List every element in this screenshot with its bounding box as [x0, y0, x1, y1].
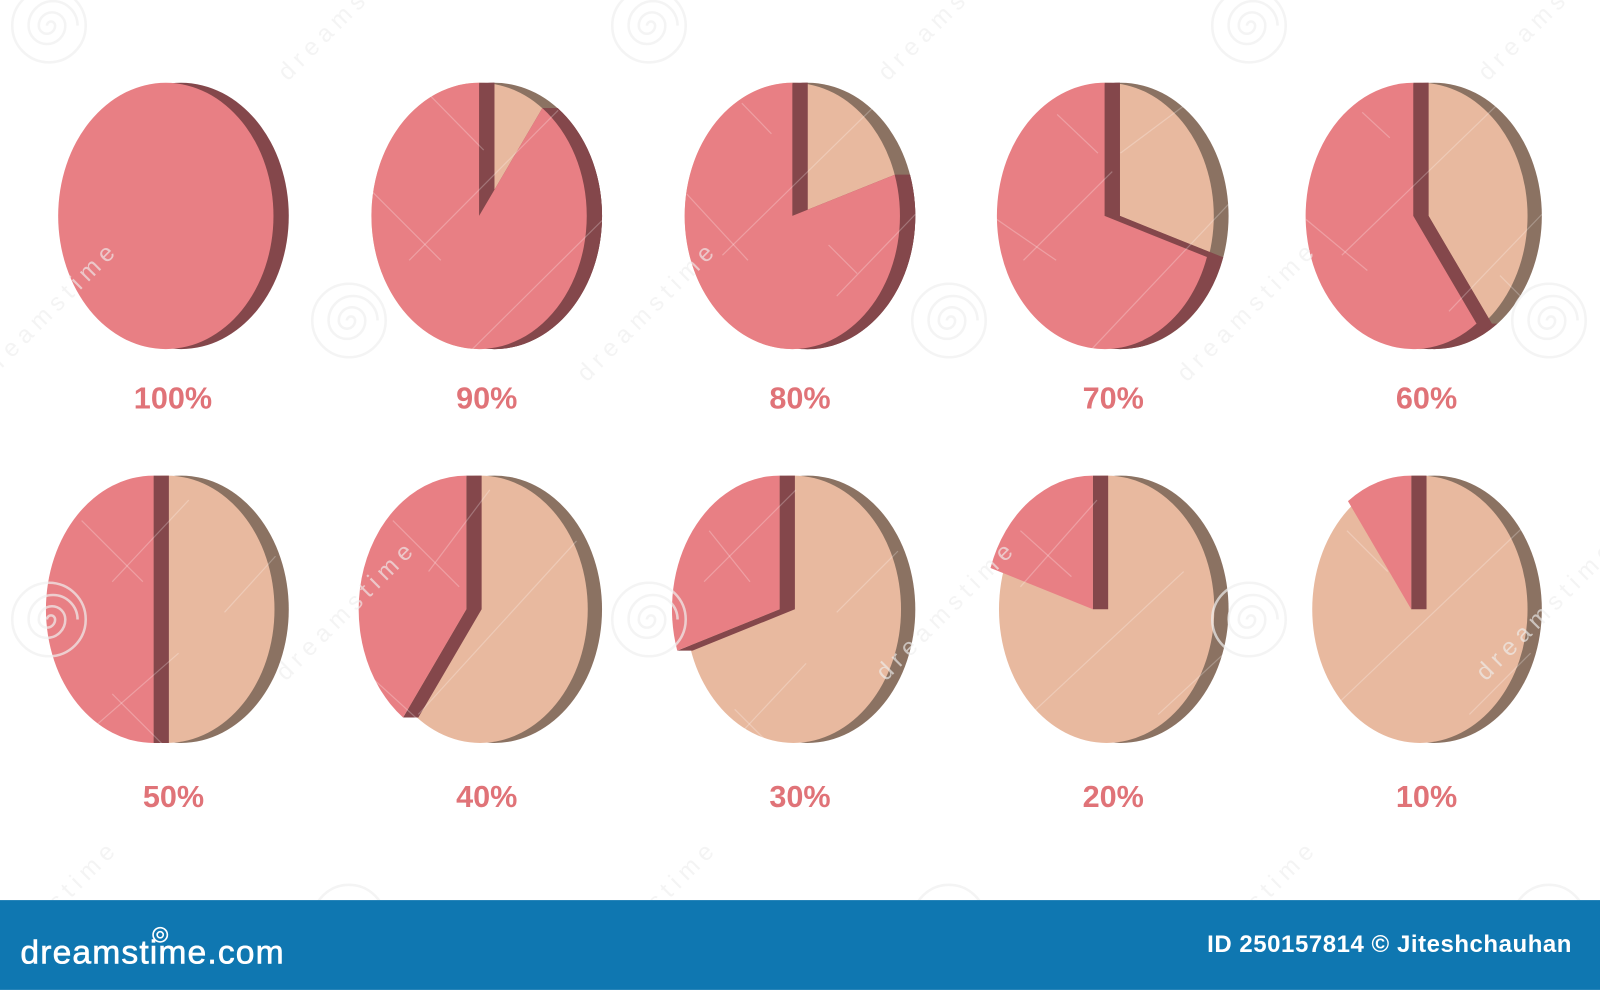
pie: 90%	[371, 83, 602, 349]
watermark: diagonal lines	[82, 95, 1542, 776]
label: 100%: 100%	[134, 381, 212, 415]
label: 40%: 40%	[456, 780, 517, 814]
label: 10%: 10%	[1396, 780, 1457, 814]
label: 70%: 70%	[1083, 381, 1144, 415]
footer logo spiral	[153, 928, 167, 942]
label: 80%: 80%	[769, 381, 831, 415]
label: 90%: 90%	[456, 381, 517, 415]
pie: 40%	[359, 476, 602, 743]
pie: 30%	[672, 476, 915, 743]
pie: 60%	[1306, 83, 1542, 349]
label: 50%: 50%	[143, 780, 204, 814]
pie: 20%	[991, 476, 1229, 743]
watermark: rotated dreamstime text: dreamstime	[1172, 239, 1319, 387]
footer logo text: dreamstime.com	[20, 934, 284, 971]
pie: 70%	[997, 83, 1229, 349]
watermark: rotated dreamstime text: dreamstime	[1172, 838, 1319, 986]
pie: 80%	[685, 83, 915, 349]
watermark: rotated dreamstime text: dreamstime	[271, 538, 418, 686]
label: 60%: 60%	[1396, 381, 1457, 415]
footer bar	[0, 900, 1600, 990]
watermark: rotated dreamstime text: dreamstime	[572, 239, 719, 387]
watermark: rotated dreamstime text: dreamstime	[871, 538, 1018, 686]
footer credit: ID 250157814 © Jiteshchauhan	[1207, 931, 1571, 958]
label: 30%: 30%	[769, 780, 831, 814]
watermark: rotated dreamstime text: dreamstime	[572, 838, 719, 986]
pie: 50%	[46, 476, 289, 743]
pie: 100%	[58, 83, 289, 349]
label: 20%: 20%	[1083, 780, 1144, 814]
pie: 10%	[1312, 476, 1542, 743]
